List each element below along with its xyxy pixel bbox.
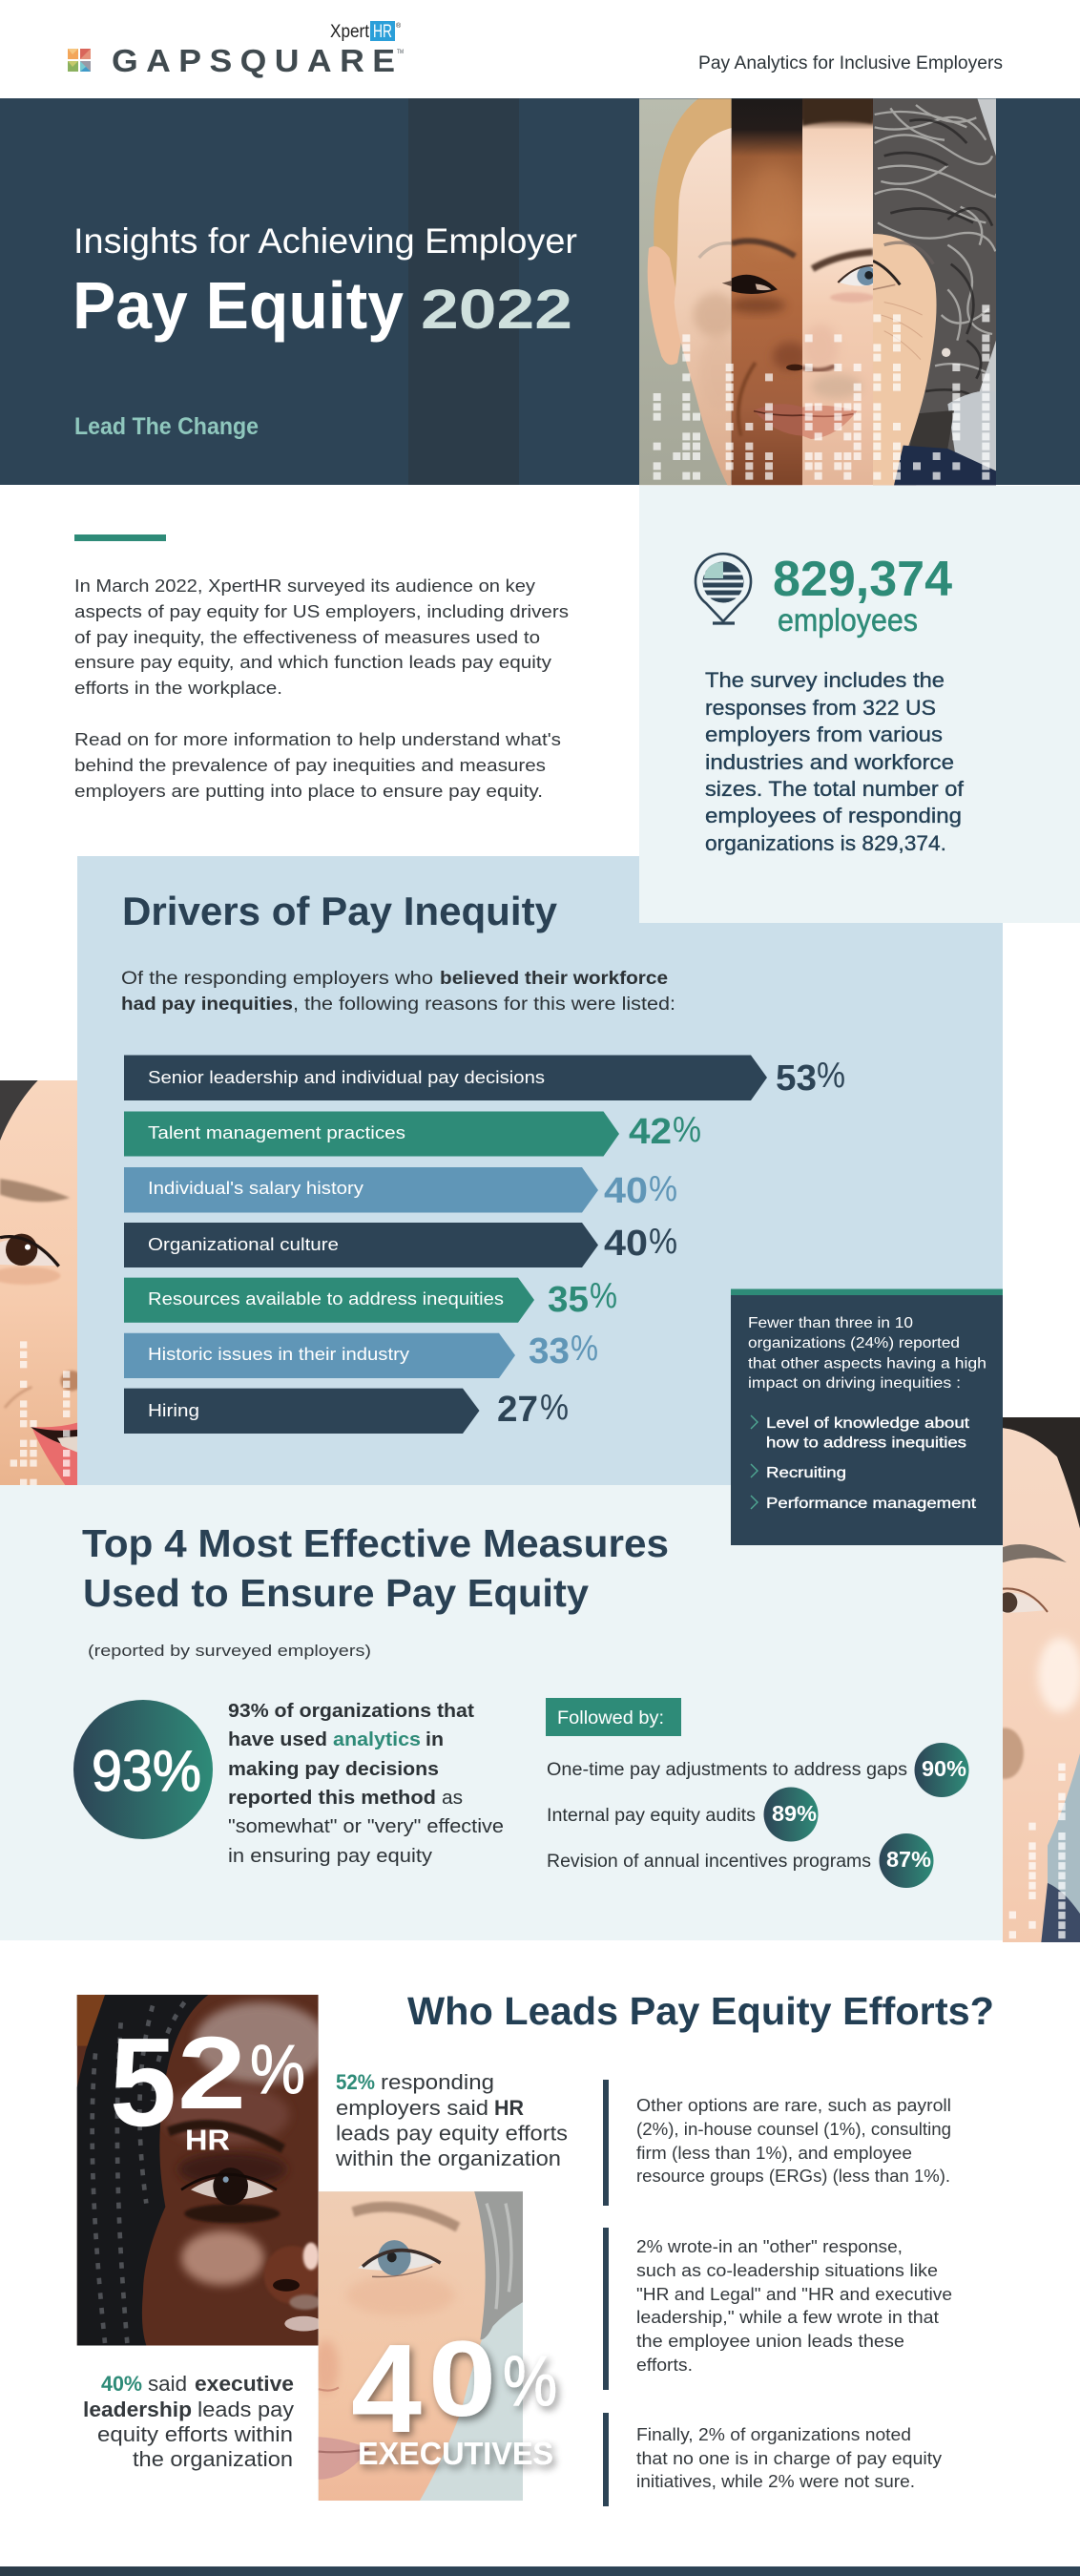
measure: one-time pay adjustments 90%: 90% (922, 1756, 966, 1781)
text: 40% said executive leadership: the organization (133, 2447, 293, 2471)
photo: man's face right (1003, 1417, 1080, 1942)
intro text: , the following reasons for this were listed: (293, 994, 675, 1015)
bar: hiring 27%: % (540, 1388, 569, 1428)
bar: talent management 42%: Talent management practices (148, 1122, 405, 1142)
intro text block: efforts in the workplace. (74, 678, 282, 698)
hero title (73, 221, 577, 343)
stat description: making pay decisions (228, 1759, 439, 1780)
section: most effective measures (73, 1521, 969, 1888)
panel: top 4 measures background (0, 1485, 1003, 1940)
text block: other responses: 2% wrote-in an "other" response, (636, 2237, 903, 2256)
icon: Gapsquare logo mark (68, 49, 91, 72)
stat description: reported this method (228, 1788, 436, 1809)
text block: other responses (603, 2228, 952, 2390)
intro text block: of pay inequity, the effectiveness of measures used to (74, 627, 540, 647)
text: 52% responding employers: employers said (336, 2096, 488, 2120)
label: followed by (546, 1698, 681, 1736)
stat description: "somewhat" or "very" effective (228, 1816, 504, 1837)
bar: senior leadership 53%: % (817, 1056, 845, 1096)
hero subtitle: Lead The Change (74, 413, 259, 440)
text block: other options (603, 2080, 951, 2206)
bar: senior leadership 53% (124, 1056, 845, 1100)
photo: composite of four faces (639, 95, 997, 487)
stat description: 93% of organizations that (228, 1701, 474, 1722)
bar chart (124, 1056, 845, 1434)
bar: talent management 42%: 42 (629, 1112, 672, 1152)
intro text: Of the responding employers who (121, 968, 433, 989)
survey description: responses from 322 US (705, 696, 936, 720)
hero title: Pay Equity (73, 268, 404, 343)
measure: internal audits 89% (547, 1787, 819, 1842)
measure: one-time pay adjustments 90%: One-time pay adjustments to address gaps (547, 1760, 907, 1780)
survey description: employers from various (705, 723, 943, 746)
stat description: in (426, 1729, 444, 1750)
stat description: in ensuring pay equity (228, 1846, 432, 1867)
measure: annual incentives 87%: 87% (886, 1847, 931, 1872)
callout list: Recruiting (766, 1465, 846, 1481)
bar: historic issues 33%: 33 (529, 1331, 570, 1372)
text block: other options: (2%), in-house counsel (1%), consulting (636, 2120, 951, 2139)
survey description: industries and workforce (705, 750, 954, 774)
decorative dot pattern (1012, 1767, 1062, 1935)
stat: 40% executives: EXECUTIVES (358, 2436, 553, 2471)
text block: other options: firm (less than 1%), and employee (636, 2144, 912, 2163)
bar: salary history 40%: 40 (604, 1171, 648, 1211)
measure: annual incentives 87%: Revision of annual incentives programs (547, 1852, 871, 1872)
XpertHR logo (330, 21, 402, 42)
intro text (121, 968, 675, 1015)
footer bar (0, 2566, 1080, 2576)
text block: other responses: "HR and Legal" and "HR and executive (636, 2285, 952, 2304)
bar: historic issues 33% (124, 1329, 598, 1378)
header bar (0, 0, 1080, 98)
text: 40% said executive leadership: leadership (83, 2398, 192, 2421)
callout text: that other aspects having a high (748, 1355, 987, 1372)
bar: resources 35%: 35 (548, 1280, 589, 1320)
XpertHR logo: ® (396, 22, 402, 30)
measure: internal audits 89%: Internal pay equity audits (547, 1806, 756, 1826)
text: 40% said executive leadership: 40% (101, 2372, 142, 2396)
survey description: employees of responding (705, 804, 962, 827)
icon: chevrons (751, 1415, 758, 1509)
survey description: organizations is 829,374. (705, 831, 946, 855)
hero title: 2022 (421, 279, 572, 341)
callout text: impact on driving inequities : (748, 1375, 961, 1392)
decorative dot pattern (657, 308, 986, 476)
logo wordmark: TM (397, 50, 404, 55)
callout list: how to address inequities (766, 1435, 966, 1451)
stat description: analytics (333, 1729, 421, 1750)
bar: salary history 40%: % (649, 1169, 677, 1209)
stat number: 829,374 (773, 552, 952, 607)
stat: 52% HR: 5 (110, 2012, 177, 2152)
heading: who leads pay equity efforts: Who Leads Pay Equity Efforts? (407, 1989, 994, 2033)
stat circle: 93%: 93% (92, 1739, 201, 1803)
measure: annual incentives 87% (547, 1833, 933, 1888)
stat description: as (442, 1788, 463, 1809)
stat: 52% HR: % (250, 2032, 305, 2108)
text block: no one in charge: Finally, 2% of organizations noted (636, 2425, 911, 2444)
stat label: employees (778, 602, 918, 638)
text: 52% responding employers: responding (381, 2070, 494, 2094)
intro text block: aspects of pay equity for US employers, including drivers (74, 601, 569, 621)
photo: executive portrait with 40% (313, 2189, 557, 2501)
bar: resources 35%: % (590, 1276, 617, 1316)
panel: survey stat (639, 486, 1080, 923)
bar: hiring 27% (124, 1388, 569, 1434)
stat description: have used (228, 1729, 327, 1750)
bar: historic issues 33%: % (571, 1329, 598, 1369)
text block: no one in charge: initiatives, while 2% were not sure. (636, 2472, 915, 2491)
text: 40% said executive leadership: leads pay (197, 2398, 294, 2421)
survey description (705, 668, 965, 855)
bar: organizational culture 40%: % (649, 1222, 677, 1262)
text block: other options: resource groups (ERGs) (less than 1%). (636, 2167, 950, 2186)
intro text block: employers are putting into place to ensure pay equity. (74, 781, 543, 801)
stat: 52% HR: 2 (177, 2015, 246, 2130)
heading: Top 4 Most Effective Measures (82, 1521, 669, 1565)
text block: other responses: leadership," while a few wrote in that (636, 2308, 939, 2327)
bar: senior leadership 53%: Senior leadership and individual pay decisions (148, 1067, 545, 1087)
survey description: sizes. The total number of (705, 777, 965, 801)
heading (82, 1521, 669, 1615)
stat: 40% executives (351, 2318, 557, 2471)
bar: hiring 27%: 27 (497, 1390, 538, 1430)
bar: talent management 42% (124, 1110, 701, 1157)
text: 52% responding employers: leads pay equity efforts (336, 2121, 568, 2146)
photo: woman's face left (0, 1079, 83, 1485)
text: 52% responding employers: HR (494, 2096, 524, 2120)
text: 52% responding employers: 52% (336, 2070, 375, 2094)
text block: no one in charge: that no one is in charge of pay equity (636, 2449, 942, 2468)
callout list: Performance management (766, 1496, 977, 1512)
heading: Used to Ensure Pay Equity (83, 1571, 589, 1615)
callout text (748, 1315, 987, 1392)
subheading: (reported by surveyed employers) (88, 1642, 371, 1660)
bar: senior leadership 53%: 53 (776, 1058, 817, 1099)
intro text block: behind the prevalence of pay inequities and measures (74, 755, 546, 775)
text: 40% said executive leadership: executive (195, 2372, 294, 2396)
measure: internal audits 89%: 89% (772, 1801, 817, 1826)
text block: other responses: the employee union leads these (636, 2332, 904, 2351)
heading: Drivers of Pay Inequity (122, 889, 558, 933)
intro text block (74, 576, 569, 801)
text block: no one in charge (603, 2413, 942, 2506)
intro text block: In March 2022, XpertHR surveyed its audience on key (74, 576, 536, 596)
bar: organizational culture 40% (124, 1222, 677, 1267)
accent bar (74, 534, 166, 541)
panel: drivers of pay inequity (77, 856, 1003, 1485)
intro text: had pay inequities (121, 994, 293, 1015)
bar: resources 35%: Resources available to address inequities (148, 1288, 504, 1309)
bar: organizational culture 40%: Organizational culture (148, 1234, 339, 1254)
callout text: organizations (24%) reported (748, 1335, 960, 1351)
bar: salary history 40% (124, 1167, 677, 1212)
XpertHR logo: Xpert (330, 22, 370, 42)
text: 52% responding employers (335, 2070, 568, 2170)
bar: talent management 42%: % (673, 1110, 701, 1150)
text: 40% said executive leadership (83, 2372, 294, 2471)
callout text: Fewer than three in 10 (748, 1315, 913, 1331)
icon: map pin with US flag (696, 554, 751, 623)
stat: 40% executives: 0 (428, 2319, 496, 2439)
callout list (766, 1415, 977, 1512)
text: 52% responding employers: within the organization (335, 2147, 561, 2170)
text block: other options: Other options are rare, such as payroll (636, 2096, 951, 2115)
callout: other drivers (731, 1288, 1003, 1545)
bar: hiring 27%: Hiring (148, 1400, 199, 1420)
stat: 40% executives: 4 (351, 2318, 422, 2459)
intro text block: ensure pay equity, and which function leads pay equity (74, 652, 552, 672)
photo: HR portrait with 52% (77, 1995, 327, 2345)
logo wordmark: GAPSQUARE (112, 44, 395, 79)
XpertHR logo: HR (373, 22, 392, 42)
measure: one-time pay adjustments 90% (547, 1743, 969, 1797)
bar: resources 35% (124, 1276, 617, 1323)
stat: 40% executives: % (503, 2341, 557, 2420)
callout list: Level of knowledge about (766, 1415, 970, 1432)
survey description: The survey includes the (705, 668, 945, 692)
text: 40% said executive leadership: equity efforts within (97, 2422, 293, 2446)
bar: historic issues 33%: Historic issues in their industry (148, 1344, 410, 1364)
text block: other responses: such as co-leadership situations like (636, 2261, 938, 2280)
intro text: believed their workforce (440, 968, 668, 989)
stat description (228, 1701, 504, 1867)
tagline: Pay Analytics for Inclusive Employers (698, 53, 1003, 73)
text block: other responses: efforts. (636, 2356, 693, 2375)
bar: organizational culture 40%: 40 (604, 1224, 648, 1264)
stat circle: 93% (73, 1700, 213, 1839)
stat: 52% HR: HR (185, 2123, 230, 2157)
stat: 52% HR (110, 2012, 305, 2157)
label: followed by: Followed by: (557, 1708, 664, 1728)
decorative dot pattern (13, 1345, 67, 1482)
intro text block: Read on for more information to help understand what's (74, 729, 561, 749)
bar: salary history 40%: Individual's salary history (148, 1178, 364, 1198)
text: 40% said executive leadership: said (148, 2372, 187, 2396)
hero title: Insights for Achieving Employer (73, 221, 577, 261)
hero banner (0, 95, 1080, 487)
